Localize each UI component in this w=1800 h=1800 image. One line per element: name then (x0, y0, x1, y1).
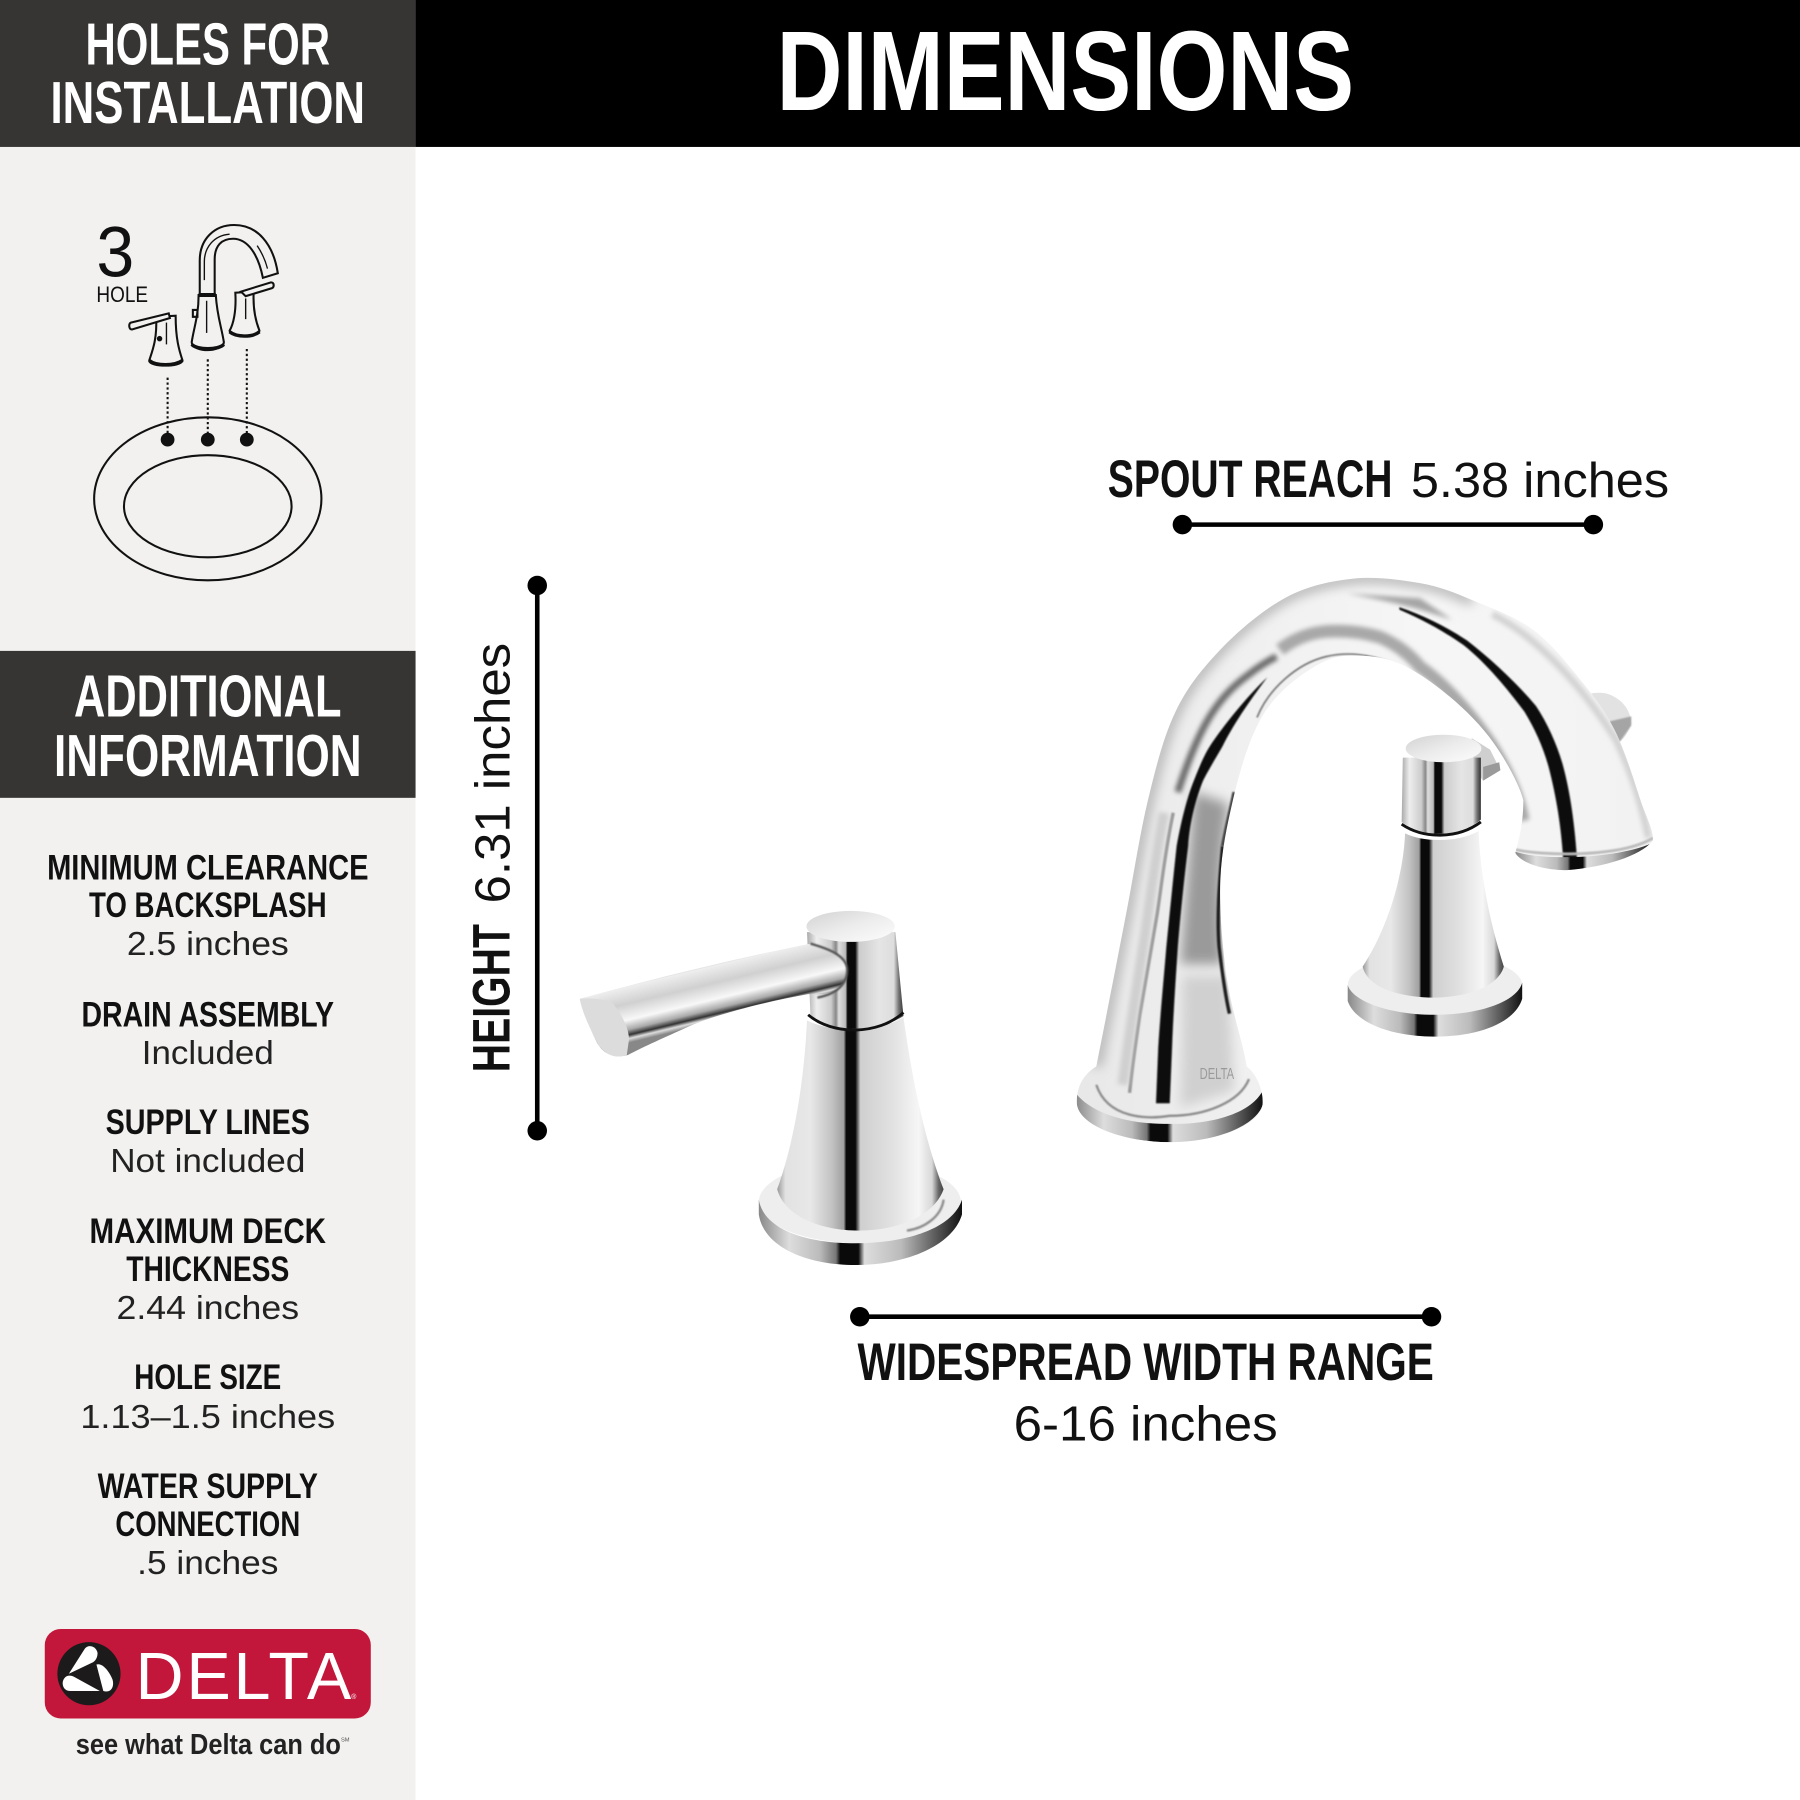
logo: delta (45, 1629, 371, 1718)
label: 3 hole: 3 (96, 214, 134, 293)
icon: sink basin (94, 417, 321, 580)
spec: maximum deck thickness: MAXIMUM DECK (90, 1211, 326, 1251)
logo: delta: ® (351, 1693, 356, 1701)
rear handle lever (1472, 693, 1631, 781)
spec: drain assembly: Included (142, 1035, 274, 1072)
spout chrome reflections (1076, 578, 1653, 1142)
heading: holes for installation (0, 0, 416, 147)
spec: water supply connection: WATER SUPPLY (98, 1466, 318, 1506)
callout: height (463, 576, 547, 1140)
right handle (1348, 735, 1522, 1037)
spec: minimum clearance (47, 847, 368, 963)
spec: water supply connection: .5 inches (137, 1545, 278, 1582)
callout: height: HEIGHT (463, 924, 522, 1072)
icon: centre spout (192, 225, 278, 350)
heading: holes for installation: HOLES FOR (86, 10, 330, 77)
spec: supply lines (106, 1102, 310, 1180)
heading: additional information: INFORMATION (54, 722, 362, 789)
icon: dotted guides (168, 349, 247, 436)
logo: delta: DELTA (135, 1640, 352, 1714)
spec: hole size: HOLE SIZE (134, 1357, 281, 1397)
heading: dimensions: DIMENSIONS (777, 8, 1354, 135)
lever arm (580, 944, 847, 1056)
text block: specifications list (47, 847, 368, 1582)
spout brand mark: DELTA (1200, 1065, 1234, 1083)
heading: dimensions (416, 0, 1800, 147)
product image: faucet set (580, 578, 1653, 1265)
left handle (580, 911, 962, 1265)
spec: water supply connection: CONNECTION (115, 1504, 300, 1544)
heading: holes for installation: INSTALLATION (51, 69, 365, 136)
label: 3 hole: HOLE (96, 282, 148, 307)
icon: right handle (230, 282, 274, 336)
label: 3 hole (96, 214, 148, 307)
panel: left sidebar (0, 0, 416, 1800)
spec: maximum deck thickness: THICKNESS (126, 1249, 289, 1289)
spec: maximum deck thickness: 2.44 inches (117, 1290, 299, 1327)
arrow: spout reach measure (1173, 515, 1603, 534)
tagline: SM (341, 1737, 350, 1743)
handle cylinder (807, 932, 903, 1029)
spec: supply lines: SUPPLY LINES (106, 1102, 310, 1142)
spec: hole size (80, 1357, 335, 1436)
lever tip (580, 998, 629, 1057)
lever knuckle (810, 944, 847, 998)
spec: drain assembly (82, 994, 334, 1072)
spec: supply lines: Not included (110, 1143, 305, 1180)
icon: delta triangle mark (57, 1642, 121, 1705)
arrow: width measure (850, 1307, 1441, 1326)
spec: maximum deck thickness (90, 1211, 326, 1327)
callout: widespread width range: 6-16 inches (1014, 1397, 1278, 1452)
heading: additional information: ADDITIONAL (74, 662, 342, 729)
icon: three hole sink diagram (94, 214, 321, 580)
arrow: height measure (527, 576, 547, 1140)
spec: water supply connection (98, 1466, 318, 1582)
callout: spout reach (1108, 450, 1669, 534)
callout: spout reach: 5.38 inches (1411, 453, 1669, 508)
callout: widespread width range: WIDESPREAD WIDTH RANGE (858, 1333, 1434, 1392)
spec: minimum clearance: MINIMUM CLEARANCE (47, 847, 368, 887)
tagline: see what Delta can do (76, 1729, 341, 1761)
spec: drain assembly: DRAIN ASSEMBLY (82, 994, 334, 1034)
spout (1076, 578, 1653, 1142)
callout: widespread width range (850, 1307, 1441, 1452)
spec: minimum clearance: TO BACKSPLASH (89, 885, 327, 925)
spec: hole size: 1.13–1.5 inches (80, 1399, 335, 1436)
callout: height: 6.31 inches (466, 643, 521, 903)
icon: mounting holes (161, 433, 254, 447)
spec: minimum clearance: 2.5 inches (127, 926, 289, 963)
icon: left handle (129, 313, 183, 366)
callout: spout reach: SPOUT REACH (1108, 450, 1392, 509)
heading: additional information (0, 651, 416, 798)
